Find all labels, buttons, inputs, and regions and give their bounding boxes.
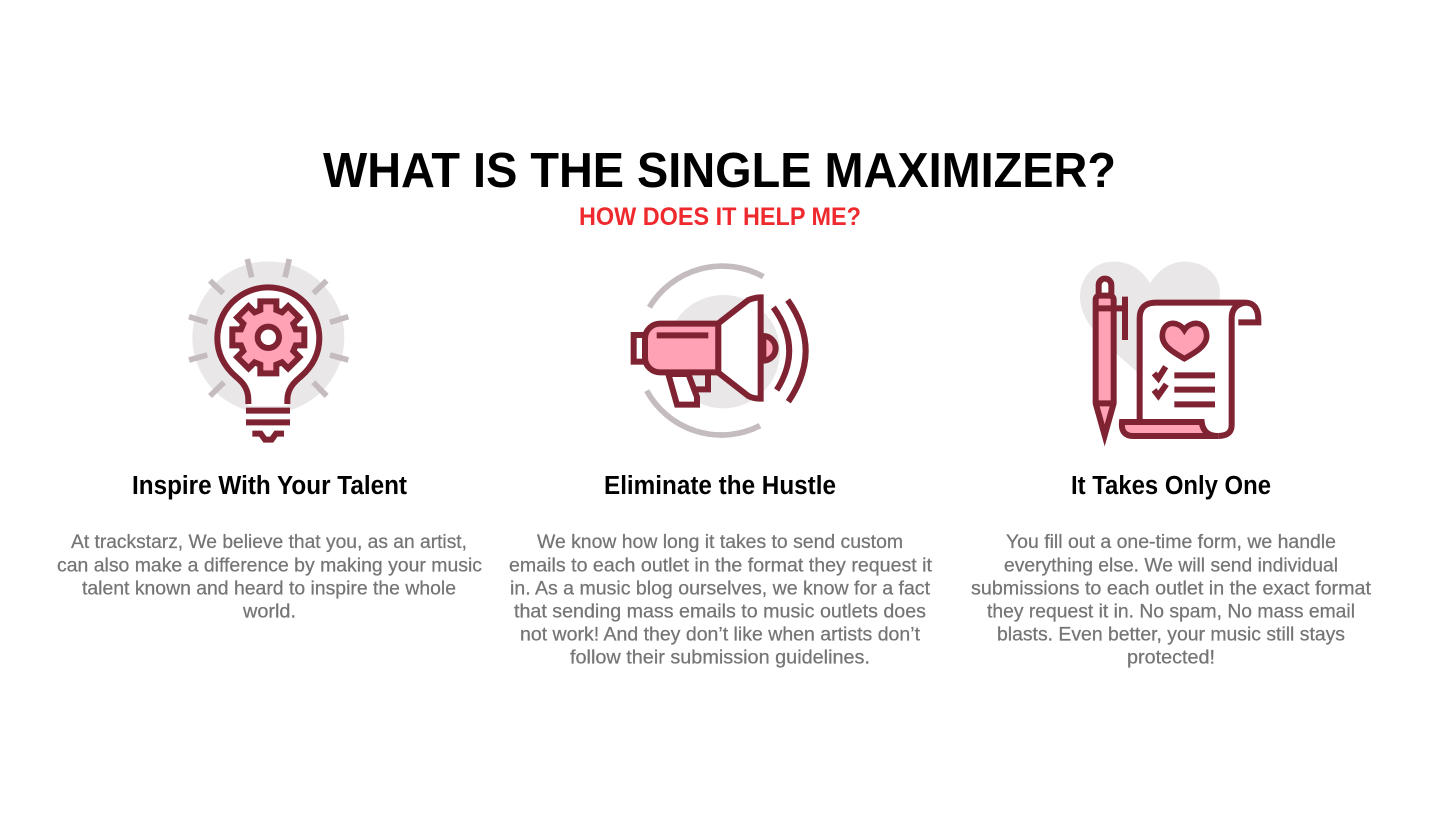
text block [509, 532, 933, 668]
text block: follow their submission guidelines. [570, 648, 870, 668]
text block: not work! And they don’t like when artists don’t [520, 624, 921, 646]
text block: they request it in. No spam, No mass email [987, 602, 1355, 622]
text block: protected! [1127, 648, 1215, 668]
text block: We know how long it takes to send custom [537, 532, 903, 553]
text block: can also make a difference by making your music [57, 556, 482, 576]
text block [971, 532, 1372, 668]
text block: in. As a music blog ourselves, we know for a fact [510, 578, 931, 600]
icon: light bulb with gear [189, 259, 348, 440]
text block: At trackstarz, We believe that you, as an artist, [71, 532, 467, 553]
text block: that sending mass emails to music outlets does [514, 602, 926, 622]
text block: talent known and heard to inspire the whole [82, 578, 456, 600]
text block: everything else. We will send individual [1004, 556, 1338, 576]
title: WHAT IS THE SINGLE MAXIMIZER? [323, 144, 1116, 198]
text block: emails to each outlet in the format they request it [509, 556, 933, 576]
heading: Inspire With Your Talent [132, 472, 407, 500]
icon: megaphone [634, 266, 806, 435]
panel: inspire with your talent [57, 259, 482, 622]
text block: submissions to each outlet in the exact format [971, 578, 1372, 600]
heading: It Takes Only One [1071, 472, 1271, 500]
panel: eliminate the hustle [509, 266, 933, 668]
text block: You fill out a one-time form, we handle [1006, 532, 1336, 553]
text block: world. [242, 602, 296, 622]
subtitle: HOW DOES IT HELP ME? [579, 203, 861, 231]
text block: blasts. Even better, your music still stays [997, 624, 1345, 646]
heading: Eliminate the Hustle [604, 472, 836, 500]
panel: it takes only one [971, 262, 1372, 668]
icon: pen and paper scroll with heart [1080, 262, 1258, 436]
text block [57, 532, 482, 622]
